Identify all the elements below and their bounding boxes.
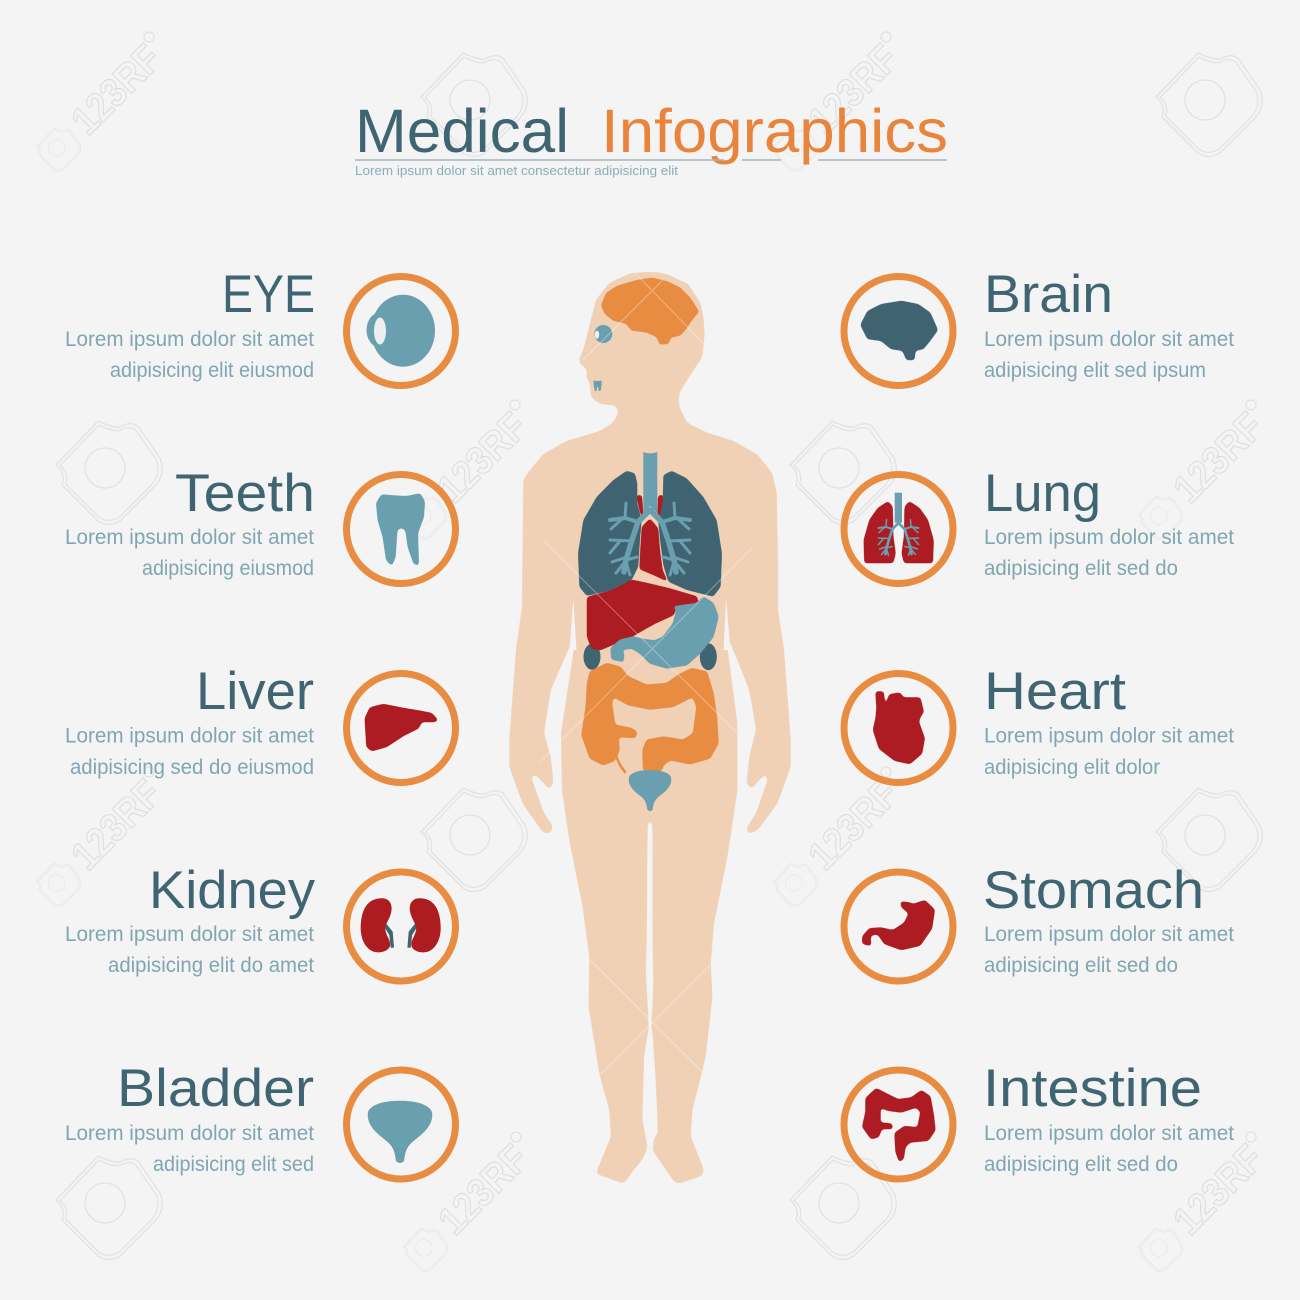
organ: stomach [611, 597, 718, 668]
organ: brain [602, 278, 698, 344]
panel: Lung [844, 464, 1234, 584]
watermark pattern: 123RF [63, 37, 170, 143]
icon: eye [346, 276, 456, 386]
text: Liver description: adipisicing sed do eiusmod [70, 756, 314, 779]
text: Lung description: Lorem ipsum dolor sit amet [984, 526, 1234, 549]
heading: Liver: Liver [196, 662, 314, 721]
text: Teeth description: adipisicing eiusmod [142, 557, 314, 580]
organ: lungs [578, 471, 722, 597]
panel: Kidney [65, 861, 456, 981]
watermark pattern: 123RF [800, 37, 907, 143]
text: Heart description [984, 724, 1234, 779]
panel: EYE [65, 265, 456, 386]
heading: Intestine: Intestine [983, 1059, 1202, 1118]
text: Intestine description [984, 1122, 1234, 1176]
text: Bladder description: adipisicing elit sed [153, 1153, 314, 1176]
panel: Liver [65, 662, 456, 782]
text: Teeth description [65, 526, 314, 580]
icon: stomach [844, 872, 953, 981]
text: EYE description: Lorem ipsum dolor sit amet [65, 328, 314, 351]
panel: Teeth [65, 464, 456, 584]
text: Brain description [984, 328, 1234, 382]
watermark pattern: 123RF [800, 772, 907, 878]
text: Brain description: Lorem ipsum dolor sit amet [984, 328, 1234, 351]
text: Heart description: Lorem ipsum dolor sit amet [984, 724, 1234, 748]
heading: Bladder: Bladder [117, 1059, 314, 1118]
panel: Stomach [844, 861, 1234, 981]
text: Stomach description: Lorem ipsum dolor sit amet [984, 923, 1234, 946]
text: Stomach description: adipisicing elit sed do [984, 954, 1178, 977]
body silhouette [510, 272, 790, 1183]
icon: bladder [346, 1070, 456, 1179]
text: Stomach description [984, 923, 1234, 977]
title block [355, 97, 948, 178]
organ: heart [636, 495, 668, 582]
text: EYE description [65, 328, 314, 382]
organ: trachea and bronchi [610, 452, 690, 575]
watermark pattern: 123RF [429, 405, 536, 511]
panel: Intestine [844, 1059, 1234, 1179]
text: Lung description [984, 526, 1234, 580]
organ: kidneys [584, 643, 717, 670]
icon: lungs [844, 474, 953, 584]
text: EYE description: adipisicing elit eiusmod [110, 359, 314, 382]
organ: eye [594, 325, 612, 343]
title: Medical: Medical [355, 97, 569, 165]
human body figure [510, 272, 790, 1183]
panel: Heart [844, 662, 1234, 782]
watermark pattern: 123RF [1165, 405, 1272, 511]
icon: liver [346, 674, 456, 782]
text: Bladder description: Lorem ipsum dolor sit amet [65, 1122, 314, 1145]
organ: liver [587, 580, 698, 650]
watermark pattern: 123RF [1165, 1137, 1272, 1243]
icon: brain [844, 276, 953, 386]
heading: Stomach: Stomach [983, 861, 1204, 920]
organ: tooth [594, 380, 602, 391]
icon: intestine [844, 1070, 953, 1179]
heading: Kidney: Kidney [149, 861, 316, 920]
title: Infographics: Infographics [601, 97, 948, 165]
organ: intestine [582, 663, 718, 772]
watermark pattern: 123RF [430, 1137, 537, 1243]
heading: Lung: Lung [984, 464, 1101, 523]
text: Teeth description: Lorem ipsum dolor sit amet [65, 526, 314, 549]
text: Liver description: Lorem ipsum dolor sit amet [65, 724, 314, 748]
text: Intestine description: Lorem ipsum dolor sit amet [984, 1122, 1234, 1145]
organ: bladder [629, 770, 671, 811]
text: Kidney description: adipisicing elit do amet [108, 954, 314, 977]
icon: heart [844, 674, 953, 782]
watermark pattern: 123RF [63, 772, 170, 878]
text: Lung description: adipisicing elit sed do [984, 557, 1178, 580]
heading: Heart: Heart [984, 662, 1126, 721]
text: Kidney description [65, 923, 314, 977]
text: Bladder description [65, 1122, 314, 1176]
heading: EYE: EYE [222, 265, 315, 324]
panel: Brain [844, 265, 1234, 386]
icon: tooth [346, 474, 456, 584]
text: Liver description [65, 724, 314, 779]
subtitle: Lorem ipsum dolor sit amet consectetur adipisicing elit [355, 163, 678, 178]
text: Brain description: adipisicing elit sed ipsum [984, 359, 1206, 382]
panel: Bladder [65, 1059, 456, 1179]
text: Kidney description: Lorem ipsum dolor sit amet [65, 923, 314, 946]
heading: Brain: Brain [984, 265, 1113, 324]
text: Heart description: adipisicing elit dolor [984, 756, 1160, 779]
text: Intestine description: adipisicing elit sed do [984, 1153, 1178, 1176]
heading: Teeth: Teeth [175, 464, 315, 523]
icon: kidneys [346, 872, 456, 981]
